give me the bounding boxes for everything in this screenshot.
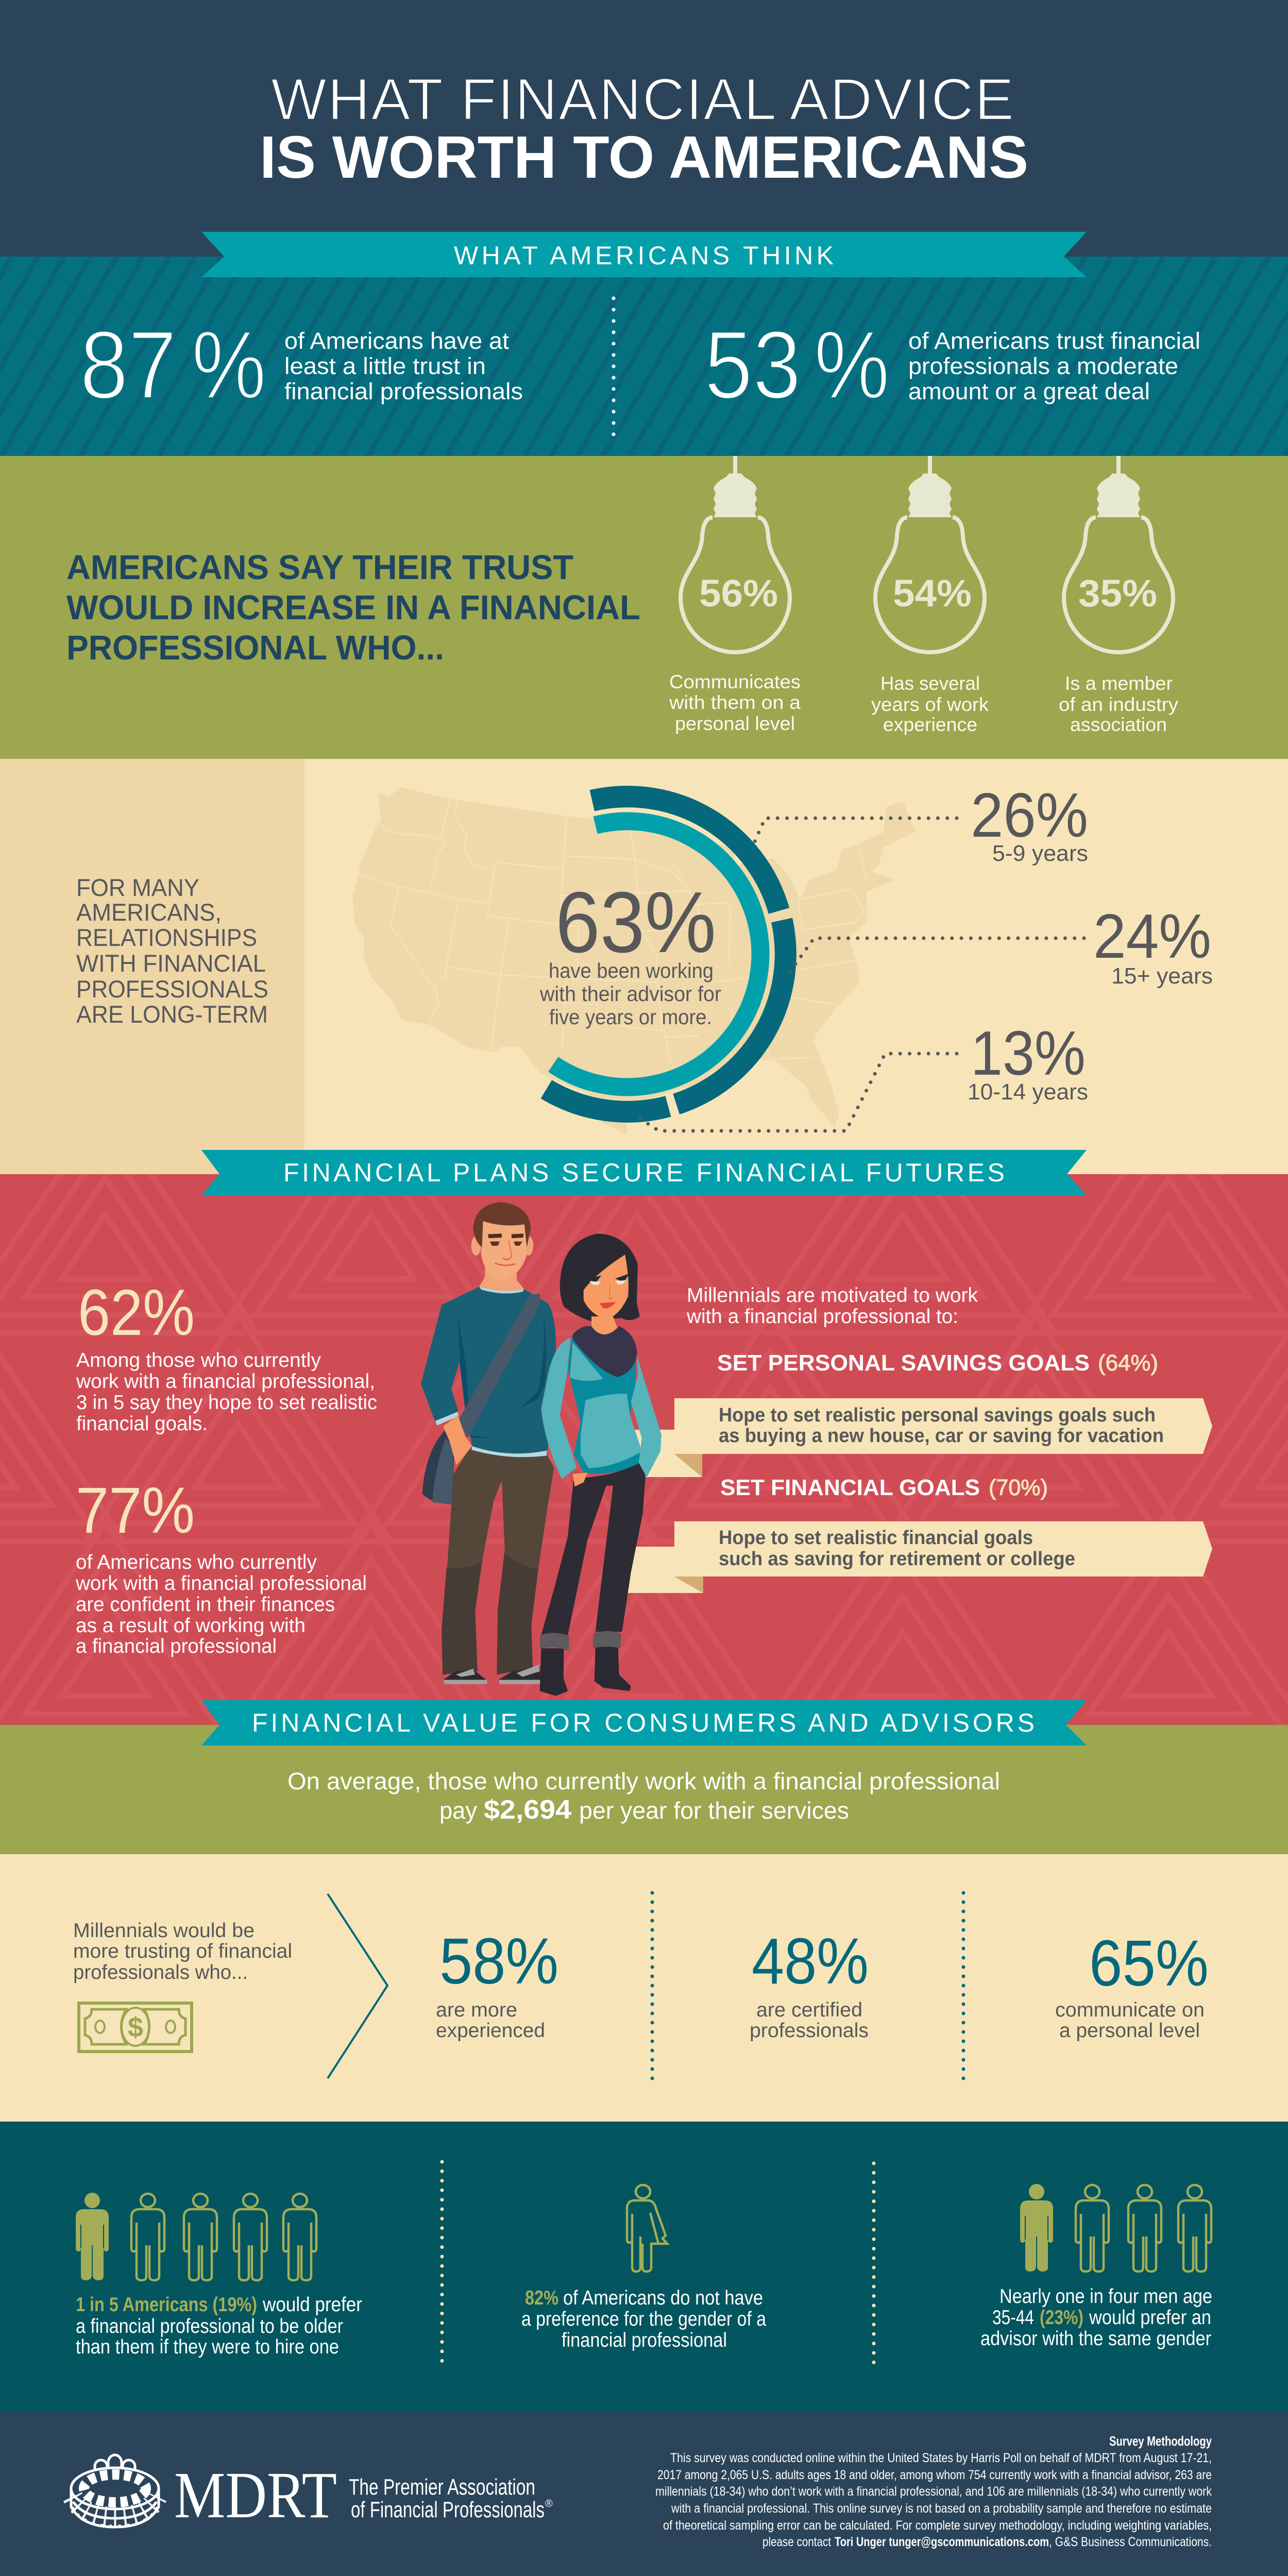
stat: 26 percent: 26% [971, 780, 1088, 850]
chart: ring of years with advisor [546, 796, 786, 1112]
icon: four people, one filled [1020, 2184, 1211, 2272]
stat: 62 percent: 3 in 5 say they hope to set realistic [76, 1392, 377, 1414]
heading: trust increase: WOULD INCREASE IN A FINANCIAL [66, 588, 640, 627]
stat: 24 percent: 24% [1093, 901, 1211, 971]
stat: 53 percent: % [814, 311, 890, 419]
stat: 53 percent: amount or a great deal [908, 378, 1150, 404]
icon: five people, one filled [76, 2193, 316, 2280]
stat: 48 percent: 48% [752, 1925, 869, 1997]
text: millennials trust: professionals who... [73, 1961, 248, 1984]
map: United States [352, 787, 916, 1134]
text: survey methodology: millennials (18-34) who don’t work with a financial professional, and 106 are millennials (18-34) who currently work [655, 2484, 1212, 2499]
panel: preferences [0, 2122, 1288, 2411]
text: same gender: 35-44 [992, 2307, 1034, 2329]
ribbon: financial value [201, 1700, 1087, 1745]
icon: dollar bill: $ [128, 2012, 143, 2043]
title: WHAT FINANCIAL ADVICE [271, 67, 1014, 132]
text: millennials trust: Millennials would be [73, 1920, 255, 1942]
text: prefer older: than them if they were to hire one [76, 2336, 339, 2358]
callout: personal savings [635, 1398, 1212, 1477]
heading: personal savings goals: SET PERSONAL SAVINGS GOALS [717, 1350, 1090, 1376]
callout: personal savings: Hope to set realistic personal savings goals such [719, 1404, 1156, 1426]
text: long-term relationships: FOR MANY [76, 874, 199, 901]
stat: 53 percent [704, 311, 1200, 419]
stat: 65 percent [1055, 1927, 1209, 2042]
text: average cost: On average, those who currently work with a financial professional [287, 1768, 1000, 1794]
icon: lightbulb 35 percent: association [1070, 714, 1167, 735]
connector: 24 percent [788, 938, 1084, 975]
stat: 62 percent: financial goals. [76, 1413, 208, 1435]
stat: 87 percent: % [192, 311, 266, 419]
stat: 77 percent: are confident in their finances [76, 1594, 335, 1616]
heading: financial goals: (70%) [989, 1475, 1048, 1500]
text: no gender preference: 82% [525, 2287, 558, 2309]
icon: lightbulb 54 percent: years of work [871, 694, 989, 715]
text: prefer older [76, 2294, 362, 2358]
stat: 63 percent: five years or more. [549, 1005, 712, 1029]
icon: lightbulb 56 percent [669, 456, 801, 734]
stat: 63 percent: with their advisor for [539, 982, 721, 1006]
stat: 87 percent: 87 [80, 311, 177, 419]
stat: 77 percent: of Americans who currently [76, 1551, 317, 1573]
panel: trust increase [0, 456, 1288, 759]
stat: 65 percent: a personal level [1059, 2020, 1200, 2042]
stat: 26 percent: 5-9 years [992, 841, 1088, 866]
text: prefer older: 1 in 5 Americans (19%) [76, 2294, 257, 2316]
icon: lightbulb 54 percent: 54% [893, 572, 972, 615]
stat: 53 percent: of Americans trust financial [908, 328, 1200, 354]
panel: financial value [0, 1700, 1288, 1854]
stat: 48 percent: are certified [756, 1999, 862, 2021]
text: no gender preference: a preference for the gender of a [521, 2308, 766, 2330]
icon: lightbulb 56 percent: personal level [675, 713, 795, 734]
arrow: chevron [328, 1894, 387, 2078]
stat: 58 percent: experienced [436, 2020, 545, 2042]
illustration: young man [421, 1202, 556, 1684]
text: same gender: (23%) [1040, 2307, 1083, 2329]
icon: lightbulb 35 percent [1059, 456, 1179, 735]
connector: 26 percent [752, 818, 957, 849]
text: same gender: Nearly one in four men age [999, 2285, 1212, 2308]
icon: lightbulb 35 percent: Is a member [1065, 673, 1173, 694]
stat: 53 percent: professionals a moderate [908, 353, 1178, 379]
icon: lightbulb 35 percent: of an industry [1059, 694, 1179, 715]
title [260, 67, 1028, 191]
stat: 63 percent [539, 874, 721, 1029]
heading: trust increase [66, 548, 640, 667]
ribbon: what Americans think: WHAT AMERICANS THINK [454, 241, 834, 270]
panel: millennials trust [0, 1854, 1288, 2122]
icon: lightbulb 56 percent: with them on a [669, 692, 801, 713]
text: same gender: advisor with the same gender [980, 2328, 1211, 2350]
heading: trust increase: AMERICANS SAY THEIR TRUST [66, 548, 573, 587]
stat: 62 percent: work with a financial professional, [76, 1370, 375, 1393]
text: no gender preference [521, 2287, 766, 2351]
text: long-term relationships: PROFESSIONALS [76, 975, 268, 1003]
stat: 62 percent: Among those who currently [76, 1349, 321, 1371]
callout: financial goals: such as saving for retirement or college [719, 1548, 1075, 1570]
stat: 48 percent [750, 1925, 869, 2042]
stat: 87 percent [80, 311, 523, 419]
stat: 87 percent: least a little trust in [284, 353, 486, 379]
text: average cost [287, 1768, 1000, 1825]
text: no gender preference: of Americans do not have [563, 2287, 763, 2309]
stat: 24 percent: 15+ years [1111, 963, 1213, 989]
stat: 77 percent: as a result of working with [76, 1615, 306, 1637]
ribbon: what Americans think [201, 232, 1087, 277]
stat: 87 percent: financial professionals [284, 378, 523, 404]
stat: 58 percent: 58% [439, 1925, 558, 1997]
panel: header [0, 0, 1288, 258]
logo: MDRT: ® [545, 2498, 553, 2510]
text: same gender [980, 2285, 1212, 2350]
stat: 77 percent [75, 1474, 367, 1657]
icon: lightbulb 54 percent: experience [883, 714, 977, 735]
logo: MDRT: MDRT [174, 2459, 337, 2532]
text: average cost: pay [439, 1797, 477, 1824]
text: long-term relationships: ARE LONG-TERM [76, 1001, 268, 1028]
stat: 77 percent: 77% [76, 1474, 195, 1547]
icon: lightbulb 35 percent: 35% [1078, 572, 1157, 615]
text: long-term relationships: AMERICANS, [76, 899, 222, 926]
callout: financial goals [624, 1521, 1212, 1593]
heading: financial goals: SET FINANCIAL GOALS [720, 1475, 980, 1500]
callout: personal savings: as buying a new house, car or saving for vacation [719, 1425, 1164, 1447]
panel: footer [0, 2411, 1288, 2576]
stat: 77 percent: a financial professional [76, 1635, 277, 1657]
logo: MDRT: The Premier Association [349, 2475, 535, 2500]
text: millennials trust: more trusting of financial [73, 1940, 292, 1962]
text: long-term relationships [76, 874, 268, 1028]
icon: gender neutral person [627, 2185, 667, 2272]
stat: 63 percent: 63% [555, 874, 716, 971]
ribbon: financial plans: FINANCIAL PLANS SECURE FINANCIAL FUTURES [283, 1158, 1005, 1187]
connector: 13 percent [636, 1054, 957, 1131]
text: millennials intro: Millennials are motivated to work [687, 1284, 978, 1307]
icon: MDRT emblem [71, 2455, 159, 2527]
heading: trust increase: PROFESSIONAL WHO... [66, 629, 444, 667]
illustration: young woman [540, 1233, 662, 1696]
stat: 13 percent: 10-14 years [968, 1079, 1088, 1105]
stat: 87 percent: of Americans have at [284, 328, 510, 354]
text: long-term relationships: WITH FINANCIAL [76, 950, 266, 977]
stat: 58 percent: are more [436, 1999, 517, 2021]
logo: MDRT: of Financial Professionals [351, 2497, 545, 2522]
text: millennials intro [686, 1284, 978, 1328]
text: long-term relationships: RELATIONSHIPS [76, 924, 257, 951]
icon: lightbulb 56 percent: Communicates [669, 671, 801, 692]
stat: 63 percent: have been working [549, 959, 714, 982]
panel: financial plans [0, 1150, 1288, 1725]
text: survey methodology: This survey was conducted online within the United States by Harris Poll on behalf of MDRT from August 17-21, [670, 2451, 1212, 2465]
text: survey methodology: of theoretical sampling error can be calculated. For complete survey methodology, including weighting variables, [663, 2518, 1212, 2533]
stat: 77 percent: work with a financial professional [75, 1572, 367, 1595]
stat: 65 percent: communicate on [1055, 1999, 1205, 2021]
ribbon: financial plans [201, 1150, 1087, 1195]
panel: long-term relationships [0, 759, 1288, 1174]
stat: 65 percent: 65% [1089, 1927, 1209, 1999]
icon: lightbulb 54 percent [871, 456, 989, 735]
text: average cost: per year for their services [579, 1797, 849, 1824]
text: same gender: would prefer an [1089, 2307, 1211, 2329]
icon: lightbulb 56 percent: 56% [699, 572, 778, 615]
text: millennials trust [73, 1920, 292, 1984]
stat: 48 percent: professionals [750, 2020, 869, 2042]
text: survey methodology: , G&S Business Communications. [1049, 2535, 1212, 2549]
panel: what Americans think [0, 232, 1288, 456]
text: no gender preference: financial professional [562, 2329, 727, 2351]
text: survey methodology: Survey Methodology [1109, 2433, 1212, 2449]
text: survey methodology: please contact [762, 2535, 831, 2549]
icon: dollar bill [79, 2003, 192, 2052]
stat: 62 percent [76, 1276, 377, 1435]
text: survey methodology [655, 2433, 1212, 2549]
text: prefer older: a financial professional to be older [76, 2315, 343, 2337]
text: prefer older: would prefer [262, 2294, 362, 2316]
text: average cost: $2,694 [484, 1795, 571, 1825]
title: IS WORTH TO AMERICANS [260, 124, 1028, 191]
stat: 58 percent [436, 1925, 558, 2042]
stat: 13 percent: 13% [971, 1018, 1086, 1088]
stat: 53 percent: 53 [704, 311, 801, 419]
callout: financial goals: Hope to set realistic financial goals [719, 1527, 1033, 1549]
heading: personal savings goals: (64%) [1098, 1350, 1158, 1376]
icon: lightbulb 54 percent: Has several [880, 673, 980, 694]
ribbon: financial value: FINANCIAL VALUE FOR CONSUMERS AND ADVISORS [252, 1708, 1035, 1737]
text: survey methodology: with a financial professional. This online survey is not based on a probability sample and therefore no estimate [671, 2501, 1212, 2516]
text: millennials intro: with a financial professional to: [686, 1306, 958, 1328]
text: survey methodology: Tori Unger tunger@gscommunications.com [835, 2535, 1049, 2549]
stat: 62 percent: 62% [78, 1276, 195, 1349]
logo: MDRT [71, 2455, 553, 2532]
